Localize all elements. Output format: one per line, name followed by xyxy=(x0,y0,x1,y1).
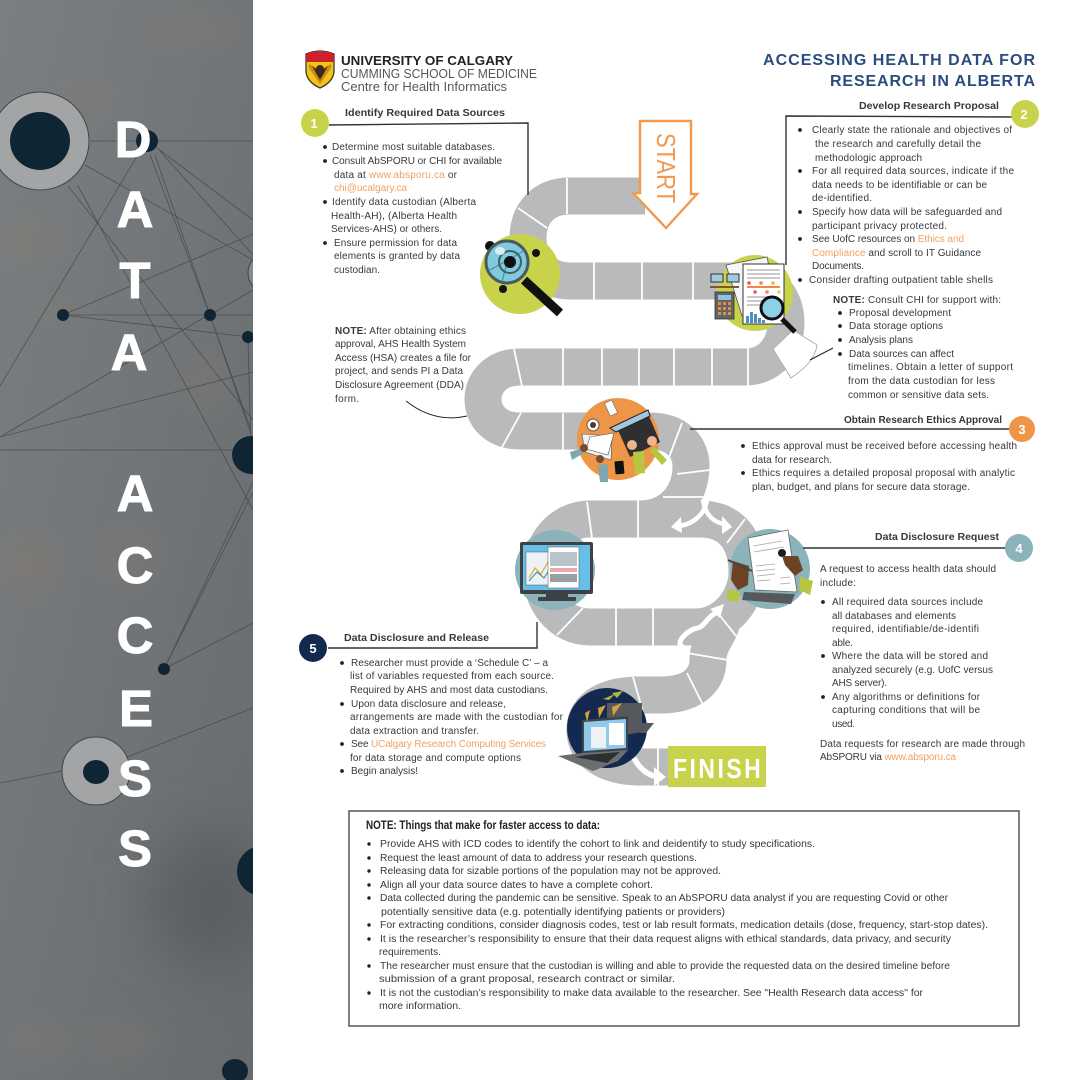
icon: monitor on teal circle xyxy=(515,530,595,610)
list: step 5 bullets: Required by AHS and most data custodians. xyxy=(350,685,548,696)
note: HSA file and DDA: form. xyxy=(335,394,359,405)
list: step 2 bullets: de-identified. xyxy=(812,193,872,204)
list: note box bullets: Request the least amount of data to address your research questions. xyxy=(380,853,697,864)
list: step 1 bullets: Ensure permission for data xyxy=(334,238,457,249)
list: step 2 bullets: For all required data sources, indicate if the xyxy=(812,166,1014,177)
sidebar heading: DATA ACCESS: C xyxy=(117,537,153,594)
intro text: step 4: A request to access health data should xyxy=(820,564,996,575)
list: step 4 bullets xyxy=(821,597,993,730)
step 4 number badge xyxy=(1005,534,1033,562)
list: note box bullets: Provide AHS with ICD codes to identify the cohort to link and deidentify to study specifications. xyxy=(380,839,815,850)
list: step 1 bullets: Services-AHS) or others. xyxy=(331,224,442,235)
icon: documents, calculator and magnifier xyxy=(710,255,795,332)
footnote: step 4: Data requests for research are made through xyxy=(820,739,1025,750)
icon: large network node xyxy=(0,92,89,190)
list: note box bullets xyxy=(367,839,988,1012)
list: step 2 bullets: data needs to be identifiable or can be xyxy=(812,180,987,191)
heading: step 2: Develop Research Proposal xyxy=(859,101,999,112)
list: note box bullets: Align all your data source dates to have a complete cohort. xyxy=(380,880,653,891)
list: step 5 bullets: Upon data disclosure and release, xyxy=(351,699,506,710)
fork arrows xyxy=(671,499,732,534)
note: HSA file and DDA xyxy=(335,326,472,405)
panel: step 3 ethics approval xyxy=(741,415,1017,493)
note: consult CHI: common or sensitive data sets. xyxy=(848,390,989,401)
icon: ring node lower xyxy=(62,737,130,805)
step 1 number badge xyxy=(301,109,329,137)
list: step 3 bullets: Ethics approval must be received before accessing health xyxy=(752,441,1017,452)
list: step 3 bullets xyxy=(741,441,1017,493)
list: step 2 bullets: Clearly state the rationale and objectives of xyxy=(812,125,1012,136)
callout shape: white road pointer xyxy=(773,330,833,378)
note: consult CHI: Proposal development xyxy=(849,308,951,319)
note: consult CHI xyxy=(833,295,1013,401)
list: step 1 bullets: Health-AH), (Alberta Health xyxy=(331,211,457,222)
sidebar heading: DATA ACCESS: A xyxy=(111,324,147,381)
sidebar heading: DATA ACCESS xyxy=(111,111,153,877)
list: step 2 bullets: Documents. xyxy=(812,261,864,272)
list: note box bullets: It is the researcher’s responsibility to ensure that their data request aligns with ethical standards, data privacy, and security xyxy=(380,934,951,945)
title: RESEARCH IN ALBERTA xyxy=(830,73,1035,90)
heading: step 5: Data Disclosure and Release xyxy=(344,633,489,644)
footnote: step 4 xyxy=(820,739,1025,763)
list: step 3 bullets: data for research. xyxy=(752,455,832,466)
list: note box bullets: Releasing data for sizable portions of the population may not be approved. xyxy=(380,866,721,877)
note: HSA file and DDA: approval, AHS Health System xyxy=(335,339,466,350)
sidebar heading: DATA ACCESS: T xyxy=(119,252,151,309)
list: step 4 bullets: AHS server). xyxy=(832,678,887,689)
finish badge: FINISH xyxy=(673,754,761,785)
list: step 5 bullets: arrangements are made with the custodian for xyxy=(350,712,564,723)
list: step 1 bullets: chi@ucalgary.ca xyxy=(334,183,407,194)
title xyxy=(763,52,1035,90)
list: step 4 bullets: analyzed securely (e.g. UofC versus xyxy=(832,665,993,676)
list: step 4 bullets: capturing conditions that will be xyxy=(832,705,980,716)
icon: laptops on navy circle xyxy=(558,688,654,771)
list: note box bullets: Data collected during the pandemic can be sensitive. Speak to an AbSPORU data analyst if you are requesting Covid or other xyxy=(380,893,949,904)
list: step 4 bullets: used. xyxy=(832,719,855,730)
note: consult CHI: timelines. Obtain a letter of support xyxy=(848,362,1013,373)
step 3 number badge xyxy=(1009,416,1035,442)
list: step 5 bullets: data extraction and transfer. xyxy=(350,726,479,737)
list: step 2 bullets: methodologic approach xyxy=(815,153,922,164)
panel: step 5 data disclosure and release xyxy=(340,633,564,777)
list: note box bullets: requirements. xyxy=(379,947,441,958)
road segment dividers xyxy=(501,178,748,787)
winding road path xyxy=(483,178,786,787)
list: step 5 bullets: list of variables requested from each source. xyxy=(350,671,554,682)
footnote: step 4: AbSPORU via www.absporu.ca xyxy=(820,752,956,763)
list: step 1 bullets: Determine most suitable databases. xyxy=(332,142,495,153)
list: note box bullets: submission of a grant proposal, research contract or similar. xyxy=(379,974,675,985)
list: note box bullets: For extracting conditions, consider diagnosis codes, test or lab result formats, medication details (dose, frequency, start-stop dates). xyxy=(380,920,988,931)
note: consult CHI: from the data custodian for less xyxy=(848,376,995,387)
list: step 2 bullets: participant privacy protected. xyxy=(812,221,947,232)
note: HSA file and DDA: Access (HSA) creates a file for xyxy=(335,353,472,364)
step 2 number badge xyxy=(1011,100,1039,128)
panel: sidebar network background xyxy=(0,0,253,1080)
note: HSA file and DDA: Disclosure Agreement (DDA) xyxy=(335,380,464,391)
step 3 connector line xyxy=(690,428,1010,430)
finish badge xyxy=(668,746,766,787)
step 5 number badge: 5 xyxy=(309,641,317,656)
step 1 connector line xyxy=(329,123,528,195)
start arrow: START xyxy=(651,133,681,203)
logo: University of Calgary: Centre for Health Informatics xyxy=(341,80,507,94)
list: step 5 bullets: for data storage and compute options xyxy=(350,753,521,764)
note: HSA file and DDA: NOTE: After obtaining ethics xyxy=(335,326,466,337)
intro text: step 4: include: xyxy=(820,578,856,589)
list: step 4 bullets: required, identifiable/de-identifi xyxy=(832,624,979,635)
logo: University of Calgary xyxy=(306,51,537,94)
icon: small network nodes xyxy=(57,130,253,1080)
list: note box bullets: It is not the custodian’s responsibility to make data available to the researcher. See "Health Research data access" for xyxy=(380,988,924,999)
list: step 5 bullets xyxy=(340,658,564,777)
step 3 number badge: 3 xyxy=(1018,422,1026,437)
list: step 1 bullets xyxy=(323,142,502,276)
list: step 2 bullets: Consider drafting outpatient table shells xyxy=(809,275,993,286)
note: consult CHI: Data storage options xyxy=(849,321,943,332)
list: step 4 bullets: Where the data will be stored and xyxy=(832,651,988,662)
start arrow xyxy=(633,121,697,228)
list: step 2 bullets: Specify how data will be safeguarded and xyxy=(812,207,1002,218)
sidebar heading: DATA ACCESS: D xyxy=(115,111,151,168)
panel: faster access note box xyxy=(349,811,1019,1026)
step 4 number badge: 4 xyxy=(1015,541,1023,556)
logo: University of Calgary: UNIVERSITY OF CALGARY xyxy=(341,53,513,68)
list: step 1 bullets: custodian. xyxy=(334,265,380,276)
logo: University of Calgary: CUMMING SCHOOL OF MEDICINE xyxy=(341,67,537,81)
list: step 4 bullets: All required data sources include xyxy=(832,597,983,608)
title: ACCESSING HEALTH DATA FOR xyxy=(763,52,1035,69)
list: step 2 bullets: Compliance and scroll to IT Guidance xyxy=(812,248,981,259)
list: step 3 bullets: plan, budget, and plans for secure data storage. xyxy=(752,482,970,493)
heading: step 3: Obtain Research Ethics Approval xyxy=(844,415,1002,426)
step 4 connector line xyxy=(803,547,1008,549)
step 2 number badge: 2 xyxy=(1020,107,1028,122)
list: step 2 bullets: the research and carefully detail the xyxy=(815,139,981,150)
list: step 4 bullets: able. xyxy=(832,638,853,649)
list: note box bullets: potentially sensitive data (e.g. potentially identifying patients or providers) xyxy=(381,907,725,918)
sidebar heading: DATA ACCESS: A xyxy=(117,181,153,238)
list: step 1 bullets: elements is granted by data xyxy=(334,251,460,262)
step 5 number badge xyxy=(299,634,327,662)
heading: step 4: Data Disclosure Request xyxy=(875,532,1000,543)
note: HSA file and DDA: project, and sends PI a Data xyxy=(335,366,463,377)
list: step 5 bullets: Begin analysis! xyxy=(351,766,418,777)
note pointer line xyxy=(406,401,467,418)
finish arrow xyxy=(634,758,666,786)
note: consult CHI: Data sources can affect xyxy=(849,349,954,360)
icon: document and pen on teal circle xyxy=(727,529,813,609)
list: note box bullets: more information. xyxy=(379,1001,461,1012)
list: step 1 bullets: Consult AbSPORU or CHI for available xyxy=(332,156,502,167)
list: step 5 bullets: See UCalgary Research Computing Services xyxy=(351,739,546,750)
note: consult CHI: NOTE: Consult CHI for support with: xyxy=(833,295,1001,306)
list: step 3 bullets: Ethics requires a detailed proposal proposal with analytic xyxy=(752,468,1015,479)
icon: magnifying glass on lime circle xyxy=(480,234,560,314)
list: note box bullets: The researcher must ensure that the custodian is willing and able to provide the requested data on the desired timeline before xyxy=(380,961,950,972)
list: step 1 bullets: Identify data custodian (Alberta xyxy=(332,197,476,208)
panel: step 1 identify data sources xyxy=(323,108,505,276)
list: step 5 bullets: Researcher must provide a ‘Schedule C’ – a xyxy=(351,658,548,669)
list: step 2 bullets: See UofC resources on Ethics and xyxy=(812,234,964,245)
panel: step 4 data disclosure request xyxy=(820,532,1025,763)
list: step 4 bullets: Any algorithms or definitions for xyxy=(832,692,981,703)
list: step 2 bullets xyxy=(798,125,1014,286)
step 2 connector line xyxy=(786,116,1012,265)
icon: laptop desk on orange circle xyxy=(570,398,667,482)
sidebar heading: DATA ACCESS: S xyxy=(118,820,152,877)
step 5 connector line xyxy=(328,622,537,648)
sidebar heading: DATA ACCESS: A xyxy=(117,465,153,522)
s-curve arrow xyxy=(680,604,724,648)
sidebar heading: DATA ACCESS: E xyxy=(119,680,153,737)
note: consult CHI: Analysis plans xyxy=(849,335,913,346)
list: step 1 bullets: data at www.absporu.ca or xyxy=(334,170,458,181)
list: step 4 bullets: all databases and elements xyxy=(832,611,956,622)
heading: note box: NOTE: Things that make for faster access to data: xyxy=(366,818,600,832)
step 1 number badge: 1 xyxy=(310,116,318,131)
heading: step 1: Identify Required Data Sources xyxy=(345,108,505,119)
panel: step 2 develop research proposal xyxy=(798,101,1014,401)
sidebar heading: DATA ACCESS: S xyxy=(118,750,152,807)
intro text: step 4 xyxy=(820,564,996,589)
sidebar heading: DATA ACCESS: C xyxy=(117,607,153,664)
